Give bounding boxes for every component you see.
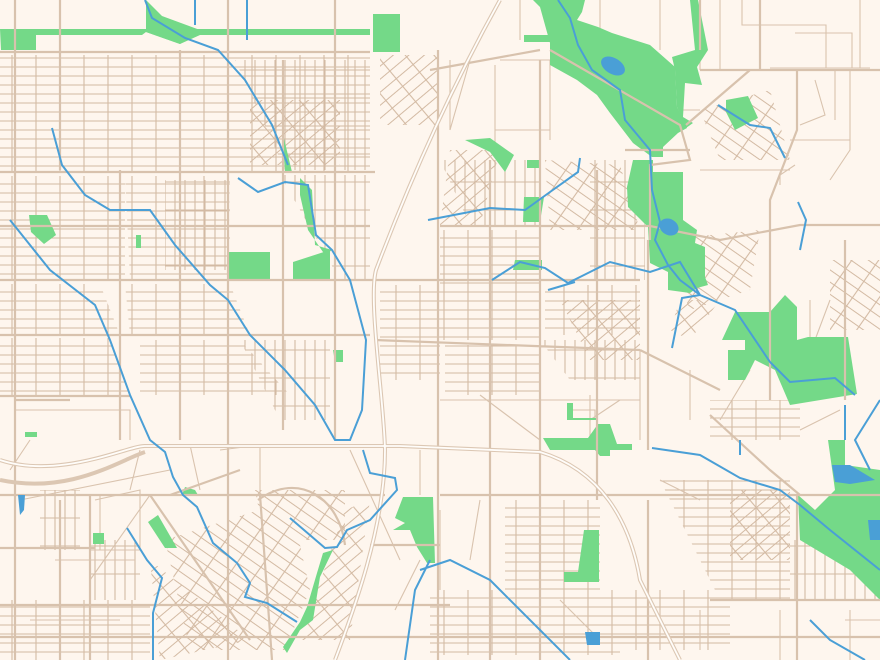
highway [0,0,680,660]
